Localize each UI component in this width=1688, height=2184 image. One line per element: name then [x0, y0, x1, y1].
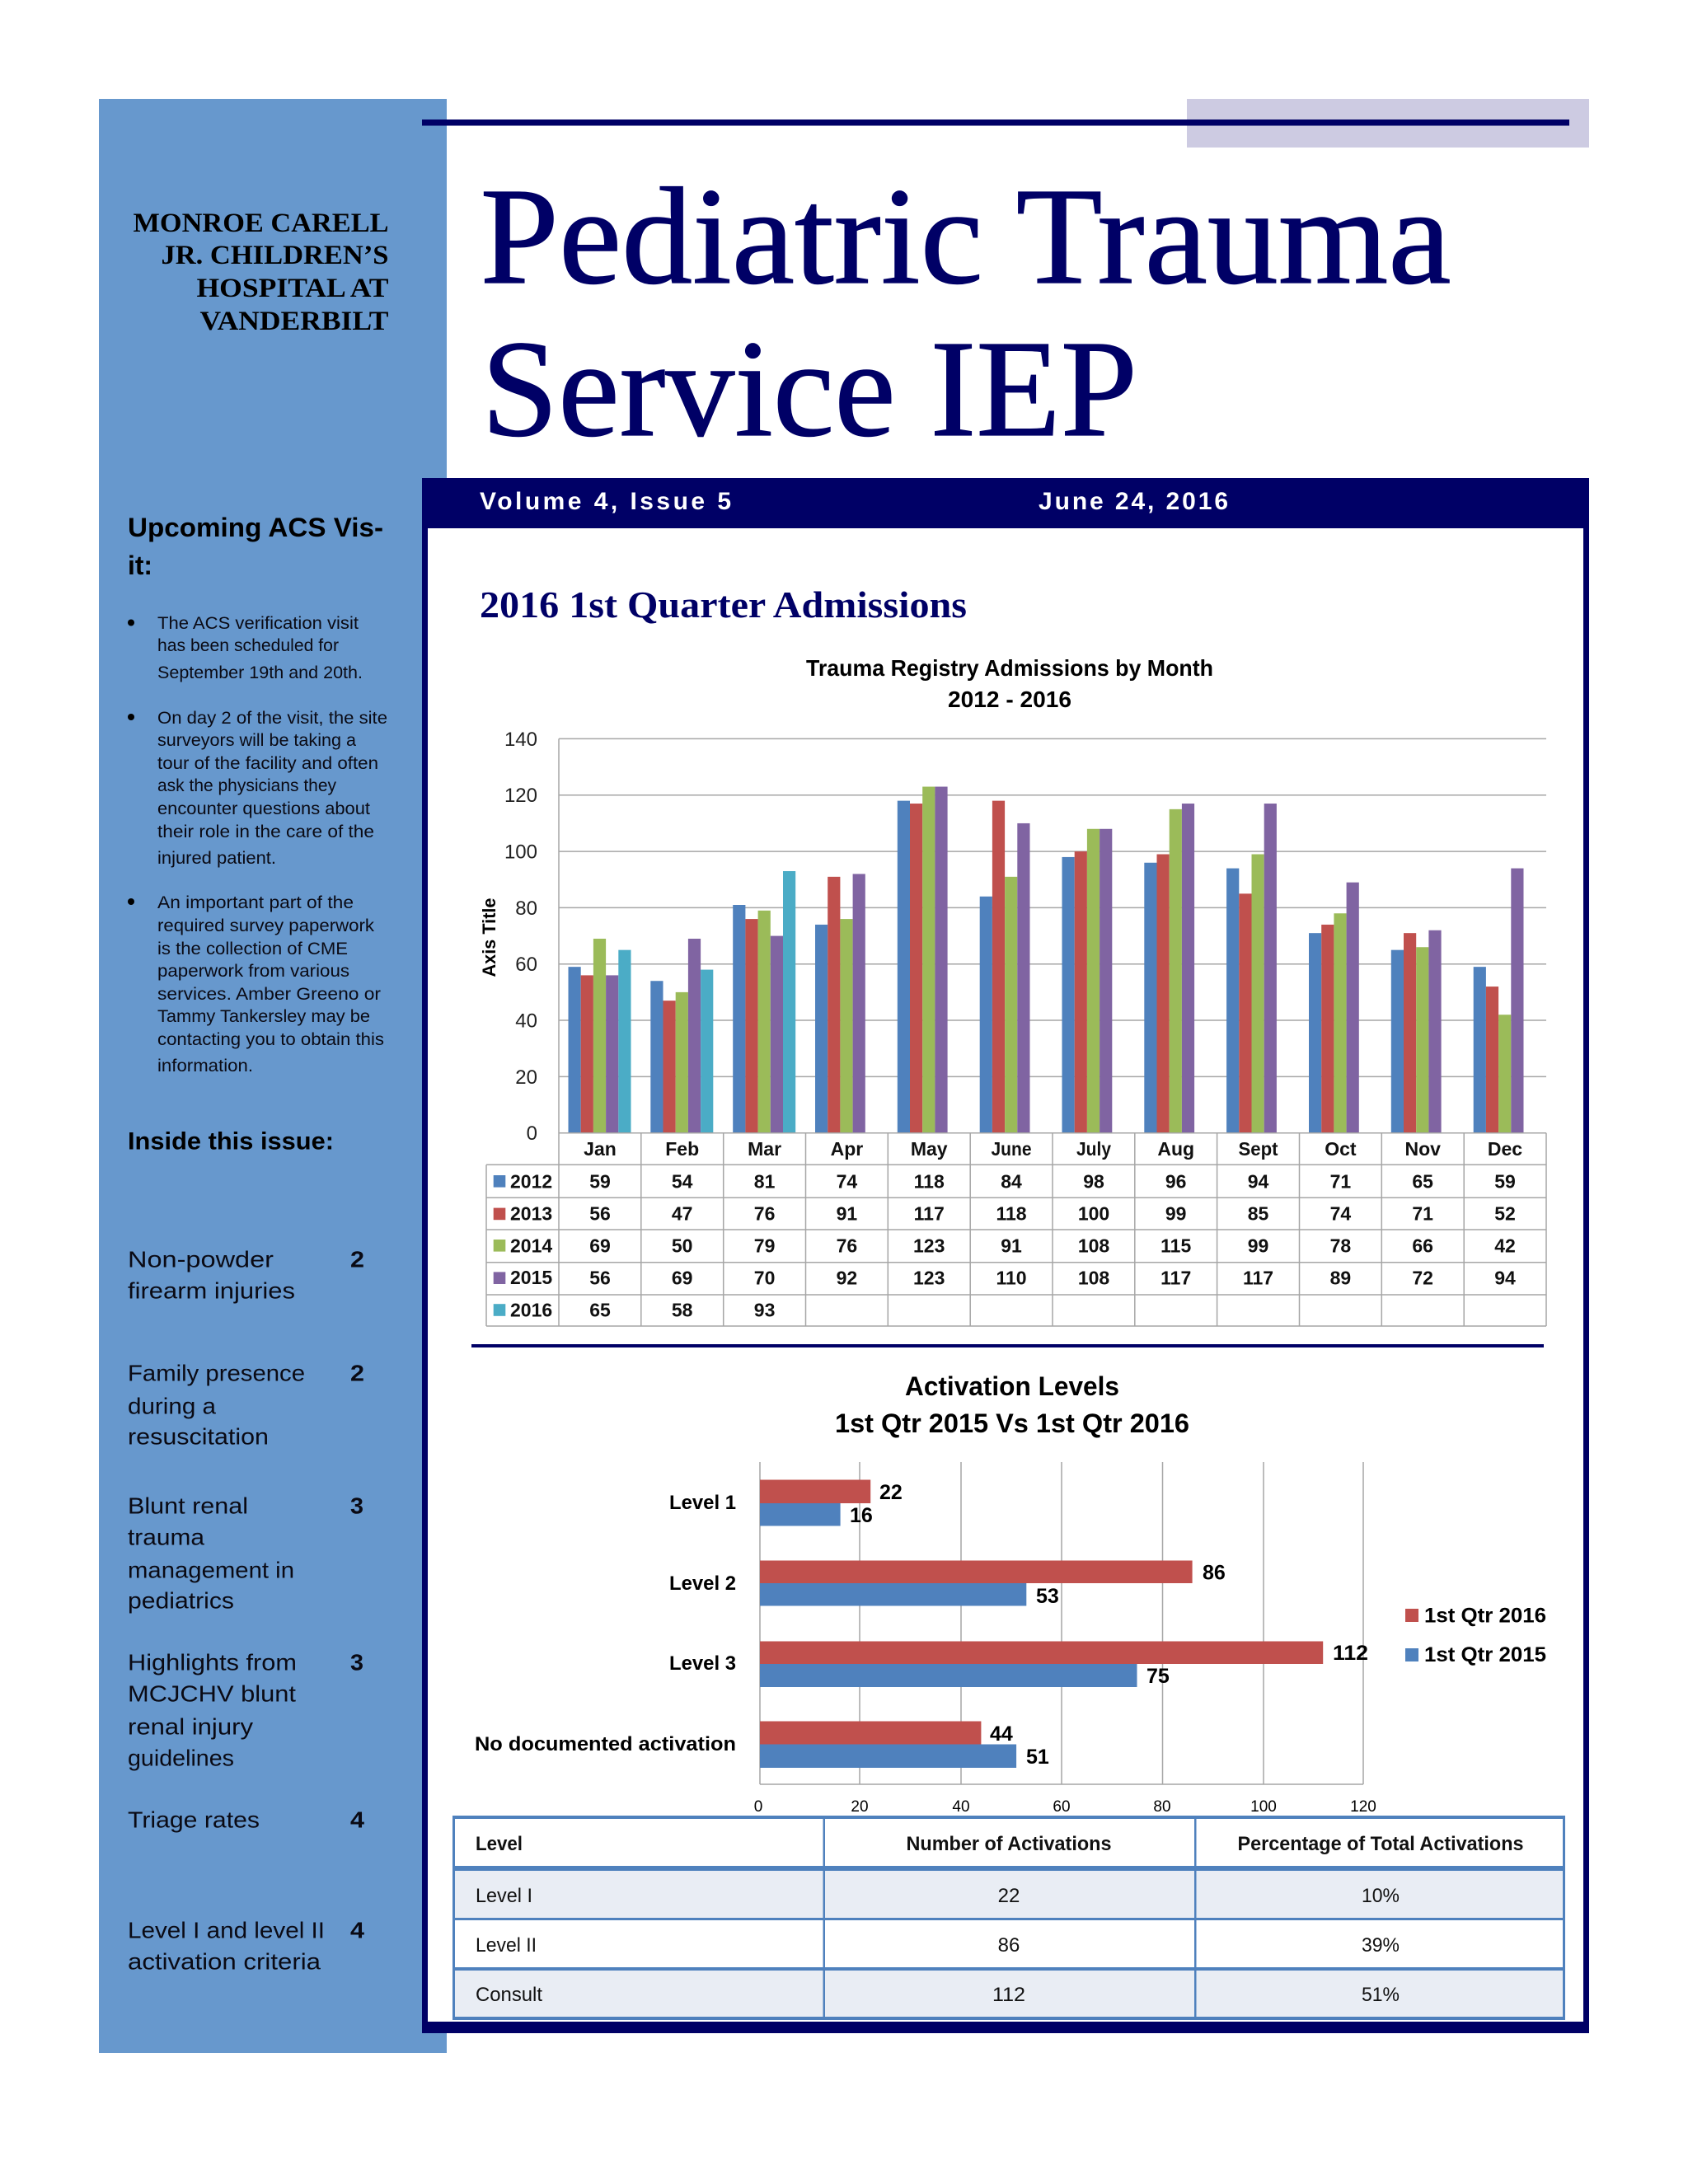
value labels: 112: [1333, 1642, 1368, 1665]
table row: level II: 39%: [1362, 1934, 1400, 1957]
hospital name: VANDERBILT: [199, 307, 389, 336]
data row 2012: 118: [914, 1170, 945, 1192]
table of contents: management in: [128, 1558, 294, 1582]
data row 2012: 98: [1083, 1170, 1104, 1192]
data row 2016: [589, 1299, 775, 1320]
data row 2015: 117: [1160, 1268, 1191, 1289]
y axis labels: 40: [515, 1010, 537, 1032]
horizontal bars: [760, 1480, 1323, 1768]
data row 2013: 76: [754, 1203, 775, 1225]
activation table: [452, 1816, 1565, 2020]
y axis labels: 60: [515, 954, 537, 976]
sidebar bullet list: The ACS verification visit: [157, 614, 359, 633]
bar chart: activation levels: [475, 1371, 1546, 1816]
category labels: Level 3: [669, 1652, 736, 1675]
y axis labels: [504, 729, 537, 1145]
data row 2012: 54: [672, 1170, 693, 1192]
data row 2013: 118: [996, 1203, 1027, 1225]
hospital name: JR. CHILDREN’S: [162, 241, 389, 270]
hospital name: MONROE CARELL: [134, 209, 389, 238]
sidebar bullet list: An important part of the: [157, 893, 354, 912]
legend swatches and years: 2014: [510, 1235, 552, 1256]
table of contents: firearm injuries: [128, 1277, 295, 1304]
chart title: Activation Levels: [905, 1371, 1119, 1401]
x axis labels: 120: [1350, 1798, 1376, 1816]
issue line: [480, 488, 1228, 515]
table row: level I: 22: [998, 1885, 1020, 1907]
x axis labels: 100: [1250, 1798, 1277, 1816]
month labels: Sept: [1238, 1138, 1278, 1160]
data row 2012: 81: [754, 1170, 776, 1192]
table row: consult: 51%: [1362, 1984, 1400, 2006]
sidebar bullet list: information.: [157, 1057, 253, 1076]
table of contents: 3: [350, 1650, 363, 1675]
data row 2014: 76: [837, 1235, 857, 1256]
value labels: 16: [850, 1504, 873, 1527]
sidebar bullet list: is the collection of CME: [157, 940, 348, 958]
legend: 1st Qtr 2015: [1424, 1643, 1546, 1666]
sidebar bullet list: tour of the facility and often: [157, 754, 378, 773]
data row 2013: 117: [914, 1203, 945, 1225]
table of contents: 4: [350, 1807, 364, 1833]
y axis labels: 100: [504, 841, 537, 864]
sidebar bullet list: their role in the care of the: [157, 823, 374, 841]
y axis labels: 80: [515, 898, 537, 920]
table of contents: 3: [350, 1493, 363, 1518]
y axis labels: 120: [504, 785, 537, 807]
data row 2015: 70: [754, 1268, 775, 1289]
x axis labels: 0: [754, 1798, 762, 1816]
data row 2013: 52: [1494, 1203, 1516, 1225]
month labels: Dec: [1488, 1138, 1522, 1160]
table header: Level: [476, 1833, 523, 1855]
chart title: Trauma Registry Admissions by Month: [806, 655, 1213, 681]
sidebar heading: inside this issue: Inside this issue:: [128, 1127, 334, 1155]
data row 2014: 78: [1330, 1235, 1351, 1256]
table header: Number of Activations: [907, 1833, 1111, 1855]
data row 2014: 69: [589, 1235, 611, 1256]
table of contents: resuscitation: [128, 1424, 269, 1449]
title: Pediatric Trauma: [480, 160, 1451, 313]
sidebar bullet list: [128, 614, 387, 1076]
data row 2012: 65: [1412, 1170, 1433, 1192]
x axis labels: 60: [1053, 1798, 1071, 1816]
sidebar bullet list: Tammy Tankersley may be: [157, 1007, 370, 1026]
table of contents: Blunt renal: [128, 1493, 248, 1518]
data row 2012: [589, 1170, 1516, 1192]
data row 2013: 100: [1078, 1203, 1109, 1225]
table of contents: 2: [350, 1246, 364, 1272]
month labels: Apr: [831, 1138, 863, 1160]
sidebar bullet list: encounter questions about: [157, 799, 370, 818]
sidebar bullet list: On day 2 of the visit, the site: [157, 709, 387, 728]
month labels: May: [911, 1138, 948, 1160]
table of contents: Family presence: [128, 1360, 305, 1386]
value labels: 86: [1203, 1561, 1226, 1584]
legend swatches and years: 2012: [510, 1170, 552, 1192]
data row 2014: 42: [1494, 1235, 1516, 1256]
sidebar heading: upcoming ACS visit: [128, 513, 383, 580]
month labels: July: [1076, 1138, 1111, 1160]
data row 2015: 108: [1078, 1268, 1109, 1289]
data row 2015: 56: [589, 1268, 611, 1289]
sidebar heading: upcoming ACS visit: Upcoming ACS Vis-: [128, 513, 383, 542]
data row 2013: [589, 1203, 1516, 1225]
legend swatches and years: 2015: [510, 1267, 552, 1288]
category labels: Level 1: [669, 1492, 736, 1514]
month labels: [584, 1138, 1522, 1160]
table of contents: activation criteria: [128, 1948, 321, 1975]
bar chart: trauma registry admissions by month: [479, 655, 1546, 1326]
value labels: [850, 1481, 1368, 1769]
data row 2013: 71: [1412, 1203, 1433, 1225]
table header: Percentage of Total Activations: [1238, 1833, 1523, 1855]
data row 2013: 74: [1330, 1203, 1351, 1225]
data row 2012: 74: [837, 1170, 857, 1192]
month labels: Oct: [1325, 1138, 1357, 1160]
legend: [1405, 1604, 1546, 1666]
data table grid: [486, 738, 1546, 1326]
navy header rule: [422, 120, 1569, 125]
title: [480, 160, 1451, 466]
value labels: 44: [990, 1722, 1013, 1746]
hospital name: [134, 209, 389, 336]
data row 2014: 50: [672, 1235, 692, 1256]
value labels: 75: [1146, 1665, 1170, 1688]
table of contents: trauma: [128, 1525, 204, 1549]
table of contents: [128, 1246, 364, 1975]
category labels: [475, 1492, 736, 1755]
data row 2012: 71: [1330, 1170, 1351, 1192]
legend swatches and years: [494, 1170, 552, 1320]
data row 2016: 65: [589, 1299, 611, 1320]
data row 2014: 115: [1160, 1235, 1191, 1256]
data row 2016: 58: [672, 1299, 693, 1320]
table row: consult: 112: [992, 1984, 1025, 2006]
month labels: Jan: [584, 1138, 617, 1160]
y axis labels: 140: [504, 729, 537, 751]
month labels: Mar: [748, 1138, 781, 1160]
table row: level I: Level I: [476, 1885, 532, 1907]
table row: level II: 86: [998, 1934, 1020, 1957]
category labels: Level 2: [669, 1572, 736, 1595]
data row 2013: 99: [1165, 1203, 1186, 1225]
sidebar bullet list: surveyors will be taking a: [157, 731, 356, 750]
data row 2013: 85: [1248, 1203, 1268, 1225]
value labels: 53: [1036, 1585, 1059, 1608]
table row: consult: Consult: [476, 1984, 542, 2006]
data row 2014: 123: [913, 1235, 945, 1256]
data row 2015: 123: [913, 1268, 945, 1289]
table row: level II: Level II: [476, 1934, 537, 1957]
data row 2013: 91: [837, 1203, 857, 1225]
data row 2013: 47: [672, 1203, 692, 1225]
y axis title: Axis Title: [479, 898, 499, 977]
title: Service IEP: [481, 312, 1137, 466]
data row 2014: 108: [1078, 1235, 1109, 1256]
legend swatches and years: 2013: [510, 1203, 552, 1225]
value labels: 22: [879, 1481, 903, 1504]
chart title: [806, 655, 1213, 712]
month labels: Feb: [665, 1138, 699, 1160]
table of contents: Level I and level II: [128, 1917, 325, 1943]
table of contents: Non-powder: [128, 1246, 274, 1272]
issue line: Volume 4, Issue 5: [480, 488, 731, 515]
chart title: [835, 1371, 1189, 1438]
y axis labels: 20: [515, 1066, 537, 1089]
data row 2014: [589, 1235, 1516, 1256]
table row: level I: 10%: [1362, 1885, 1400, 1907]
table of contents: Triage rates: [128, 1807, 260, 1833]
table of contents: renal injury: [128, 1714, 253, 1739]
data row 2014: 66: [1412, 1235, 1433, 1256]
table of contents: MCJCHV blunt: [128, 1681, 296, 1706]
data row 2014: 79: [754, 1235, 775, 1256]
lilac header block: [1187, 99, 1589, 148]
data row 2012: 94: [1248, 1170, 1268, 1192]
table of contents: 4: [350, 1917, 364, 1943]
data row 2012: 96: [1165, 1170, 1186, 1192]
x axis labels: 20: [851, 1798, 869, 1816]
data row 2012: 59: [1494, 1170, 1516, 1192]
category labels: No documented activation: [475, 1733, 736, 1755]
data row 2015: 69: [672, 1268, 692, 1289]
y axis labels: 0: [527, 1122, 537, 1145]
table of contents: pediatrics: [128, 1587, 234, 1614]
table row: consult: [476, 1984, 1400, 2006]
hospital name: HOSPITAL AT: [196, 274, 389, 303]
data row 2016: 93: [754, 1299, 775, 1320]
data row 2015: 94: [1494, 1268, 1516, 1289]
month labels: June: [991, 1138, 1032, 1160]
data row 2015: 72: [1412, 1268, 1433, 1289]
legend swatches and years: 2016: [510, 1299, 552, 1320]
x axis labels: 40: [952, 1798, 970, 1816]
data row 2012: 84: [1001, 1170, 1022, 1192]
data row 2014: 99: [1248, 1235, 1268, 1256]
sidebar bullet list: September 19th and 20th.: [157, 663, 363, 682]
x axis labels: 80: [1153, 1798, 1171, 1816]
x axis labels: [754, 1798, 1376, 1816]
panel: main navy frame: [422, 478, 1589, 2033]
sidebar bullet list: services. Amber Greeno or: [157, 985, 381, 1004]
table header: [476, 1833, 1523, 1855]
table of contents: 2: [350, 1360, 364, 1386]
sidebar bullet list: ask the physicians they: [157, 776, 336, 795]
data row 2015: 110: [996, 1268, 1027, 1289]
sidebar bullet list: paperwork from various: [157, 962, 349, 981]
data row 2015: [589, 1268, 1516, 1289]
section heading: 2016 1st Quarter Admissions: [480, 583, 967, 626]
sidebar bullet list: required survey paperwork: [157, 916, 375, 935]
sidebar bullet list: has been scheduled for: [157, 636, 339, 655]
bars: [569, 787, 1523, 1133]
table of contents: Highlights from: [128, 1650, 297, 1675]
data row 2015: 92: [837, 1268, 857, 1289]
table row: level I: [476, 1885, 1400, 1907]
chart title: 2012 - 2016: [948, 687, 1071, 712]
table of contents: during a: [128, 1393, 216, 1419]
sidebar bullet list: contacting you to obtain this: [157, 1030, 384, 1049]
panel: blue sidebar: [99, 99, 447, 2053]
month labels: Aug: [1157, 1138, 1194, 1160]
data row 2015: 89: [1330, 1268, 1351, 1289]
chart title: 1st Qtr 2015 Vs 1st Qtr 2016: [835, 1408, 1189, 1438]
value labels: 51: [1026, 1746, 1049, 1769]
month labels: Nov: [1404, 1138, 1441, 1160]
legend: 1st Qtr 2016: [1424, 1604, 1546, 1627]
data row 2015: 117: [1243, 1268, 1273, 1289]
sidebar heading: upcoming ACS visit: it:: [128, 551, 152, 580]
issue line: June 24, 2016: [1039, 488, 1228, 515]
data row 2013: 56: [589, 1203, 611, 1225]
data row 2014: 91: [1001, 1235, 1022, 1256]
table row: level II: [476, 1934, 1400, 1957]
sidebar bullet list: injured patient.: [157, 849, 276, 868]
data row 2012: 59: [589, 1170, 611, 1192]
table of contents: guidelines: [128, 1746, 234, 1770]
